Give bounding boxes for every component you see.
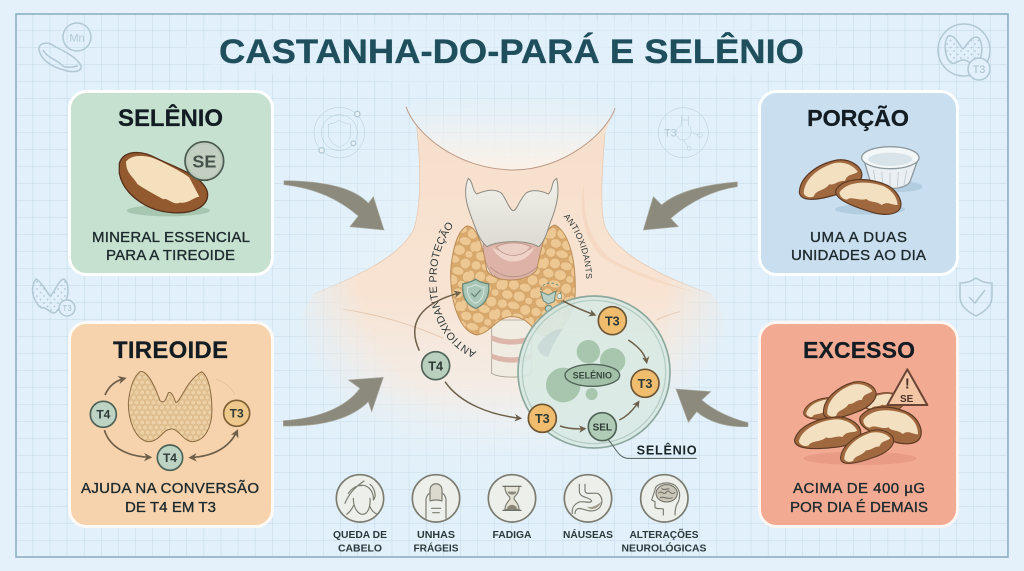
thyroid gland [451,225,575,336]
icon: castanha com SE: SE [192,151,216,171]
selenium cluster [546,340,625,402]
shield on the thyroid [463,279,489,308]
large arrow bottom left [283,377,383,426]
title: CASTANHA-DO-PARÁ E SELÊNIO [219,33,804,71]
icon: faint nut with Mn [39,23,91,72]
icon: faint nut with Mn: Mn [69,32,85,44]
label: unhas: UNHAS [417,529,455,541]
panel: excesso [760,322,958,526]
text: mineral essencial: MINERAL ESSENCIAL [92,229,250,246]
diagram: conversão T4 T3: T4 [96,408,111,422]
label: alterações: ALTERAÇÕES [630,528,698,541]
heading: selênio: SELÊNIO [118,104,223,132]
neck and shoulders [307,106,719,430]
icon: pilha de castanhas com alerta: SE [900,394,914,405]
callout: selênio: SELÊNIO [637,442,697,457]
central illustration: thyroid in the neck [307,106,719,459]
cell circle [518,296,670,448]
text: para a tireoide: PARA A TIREOIDE [106,247,235,264]
node: T3 lower [528,404,556,432]
node: T3 lower: T3 [535,412,550,426]
icon: faint thyroid left [33,279,75,316]
label: cabelo: CABELO [338,542,382,554]
label: náuseas: NÁUSEAS [563,528,613,541]
symptom: fadiga [488,475,536,541]
icon: faint thyroid with T3: T3 [973,64,985,76]
icon: faint thyroid with T3 [938,24,990,80]
node: T4 [422,352,450,380]
label: queda de: QUEDA DE [333,529,387,541]
callout: selênio [608,440,697,458]
symptom: queda de cabelo [333,475,387,541]
larynx ring [483,240,543,287]
panel: selênio [70,92,272,274]
symptom: unhas frágeis [412,475,460,541]
text: por dia é demais: POR DIA É DEMAIS [790,499,928,516]
text: de T4 em T3: DE T4 EM T3 [125,499,216,516]
icon: castanhas e ramequim [793,147,923,220]
conversion arrows [415,293,647,429]
icon: castanha com SE [119,142,224,216]
large arrow bottom right [676,389,748,427]
icon: pilha de castanhas com alerta [793,369,927,468]
heading: excesso: EXCESSO [803,337,915,363]
diagram: conversão T4 T3 [90,372,250,470]
panel: porção [760,92,958,274]
icon: T3 molecule [658,108,708,158]
text: uma a duas: UMA A DUAS [810,229,907,246]
icon: faint shield right [960,278,992,316]
diagram: conversão T4 T3: T3 [230,407,244,421]
large arrow top left [284,181,384,230]
icon: cabelo [336,475,384,522]
label: neurológicas: NEUROLÓGICAS [622,542,706,554]
trachea [492,320,532,377]
broken shield on the thyroid [541,283,562,312]
panel: tireoide [70,322,272,526]
symptom: náuseas [563,475,613,541]
heading: porção: PORÇÃO [807,104,909,131]
icon: unha [412,475,460,522]
larynx cartilage [466,178,558,247]
node: T3 right [631,369,659,397]
icon: shield circle [314,107,365,158]
icon: pilha de castanhas com alerta: ! [905,376,910,392]
node: SEL: SEL [593,422,612,433]
text: unidades ao dia: UNIDADES AO DIA [791,247,926,264]
icon: T3 molecule: T3 [664,128,677,140]
diagram: conversão T4 T3: T4 [163,451,177,465]
selenium cluster: SELÊNIO [573,370,612,381]
icon: faint thyroid left: T3 [62,304,72,313]
text: ajuda na conversão: AJUDA NA CONVERSÃO [81,480,259,497]
node: T4: T4 [428,359,443,373]
chin line [406,107,615,170]
node: T3 right: T3 [638,377,652,391]
symptom: alterações neurológicas [630,475,698,541]
icon: cérebro [641,475,688,522]
node: SEL [588,413,616,441]
icon: estômago [564,475,612,522]
node: T3 upper [598,307,626,335]
text: acima de 400 µg: ACIMA DE 400 µG [793,480,925,497]
icon: ampulheta [488,475,536,522]
node: T3 upper: T3 [605,314,620,328]
symptoms row [333,475,706,554]
label: fadiga: FADIGA [492,529,532,541]
text: antioxidants: ANTIOXIDANTS [564,214,592,278]
large arrow top right [643,182,737,230]
text: antioxidante proteção: ANTIOXIDANTE PROTEÇÃO [429,222,476,357]
label: frágeis: FRÁGEIS [414,542,458,554]
heading: tireoide: TIREOIDE [113,337,228,364]
